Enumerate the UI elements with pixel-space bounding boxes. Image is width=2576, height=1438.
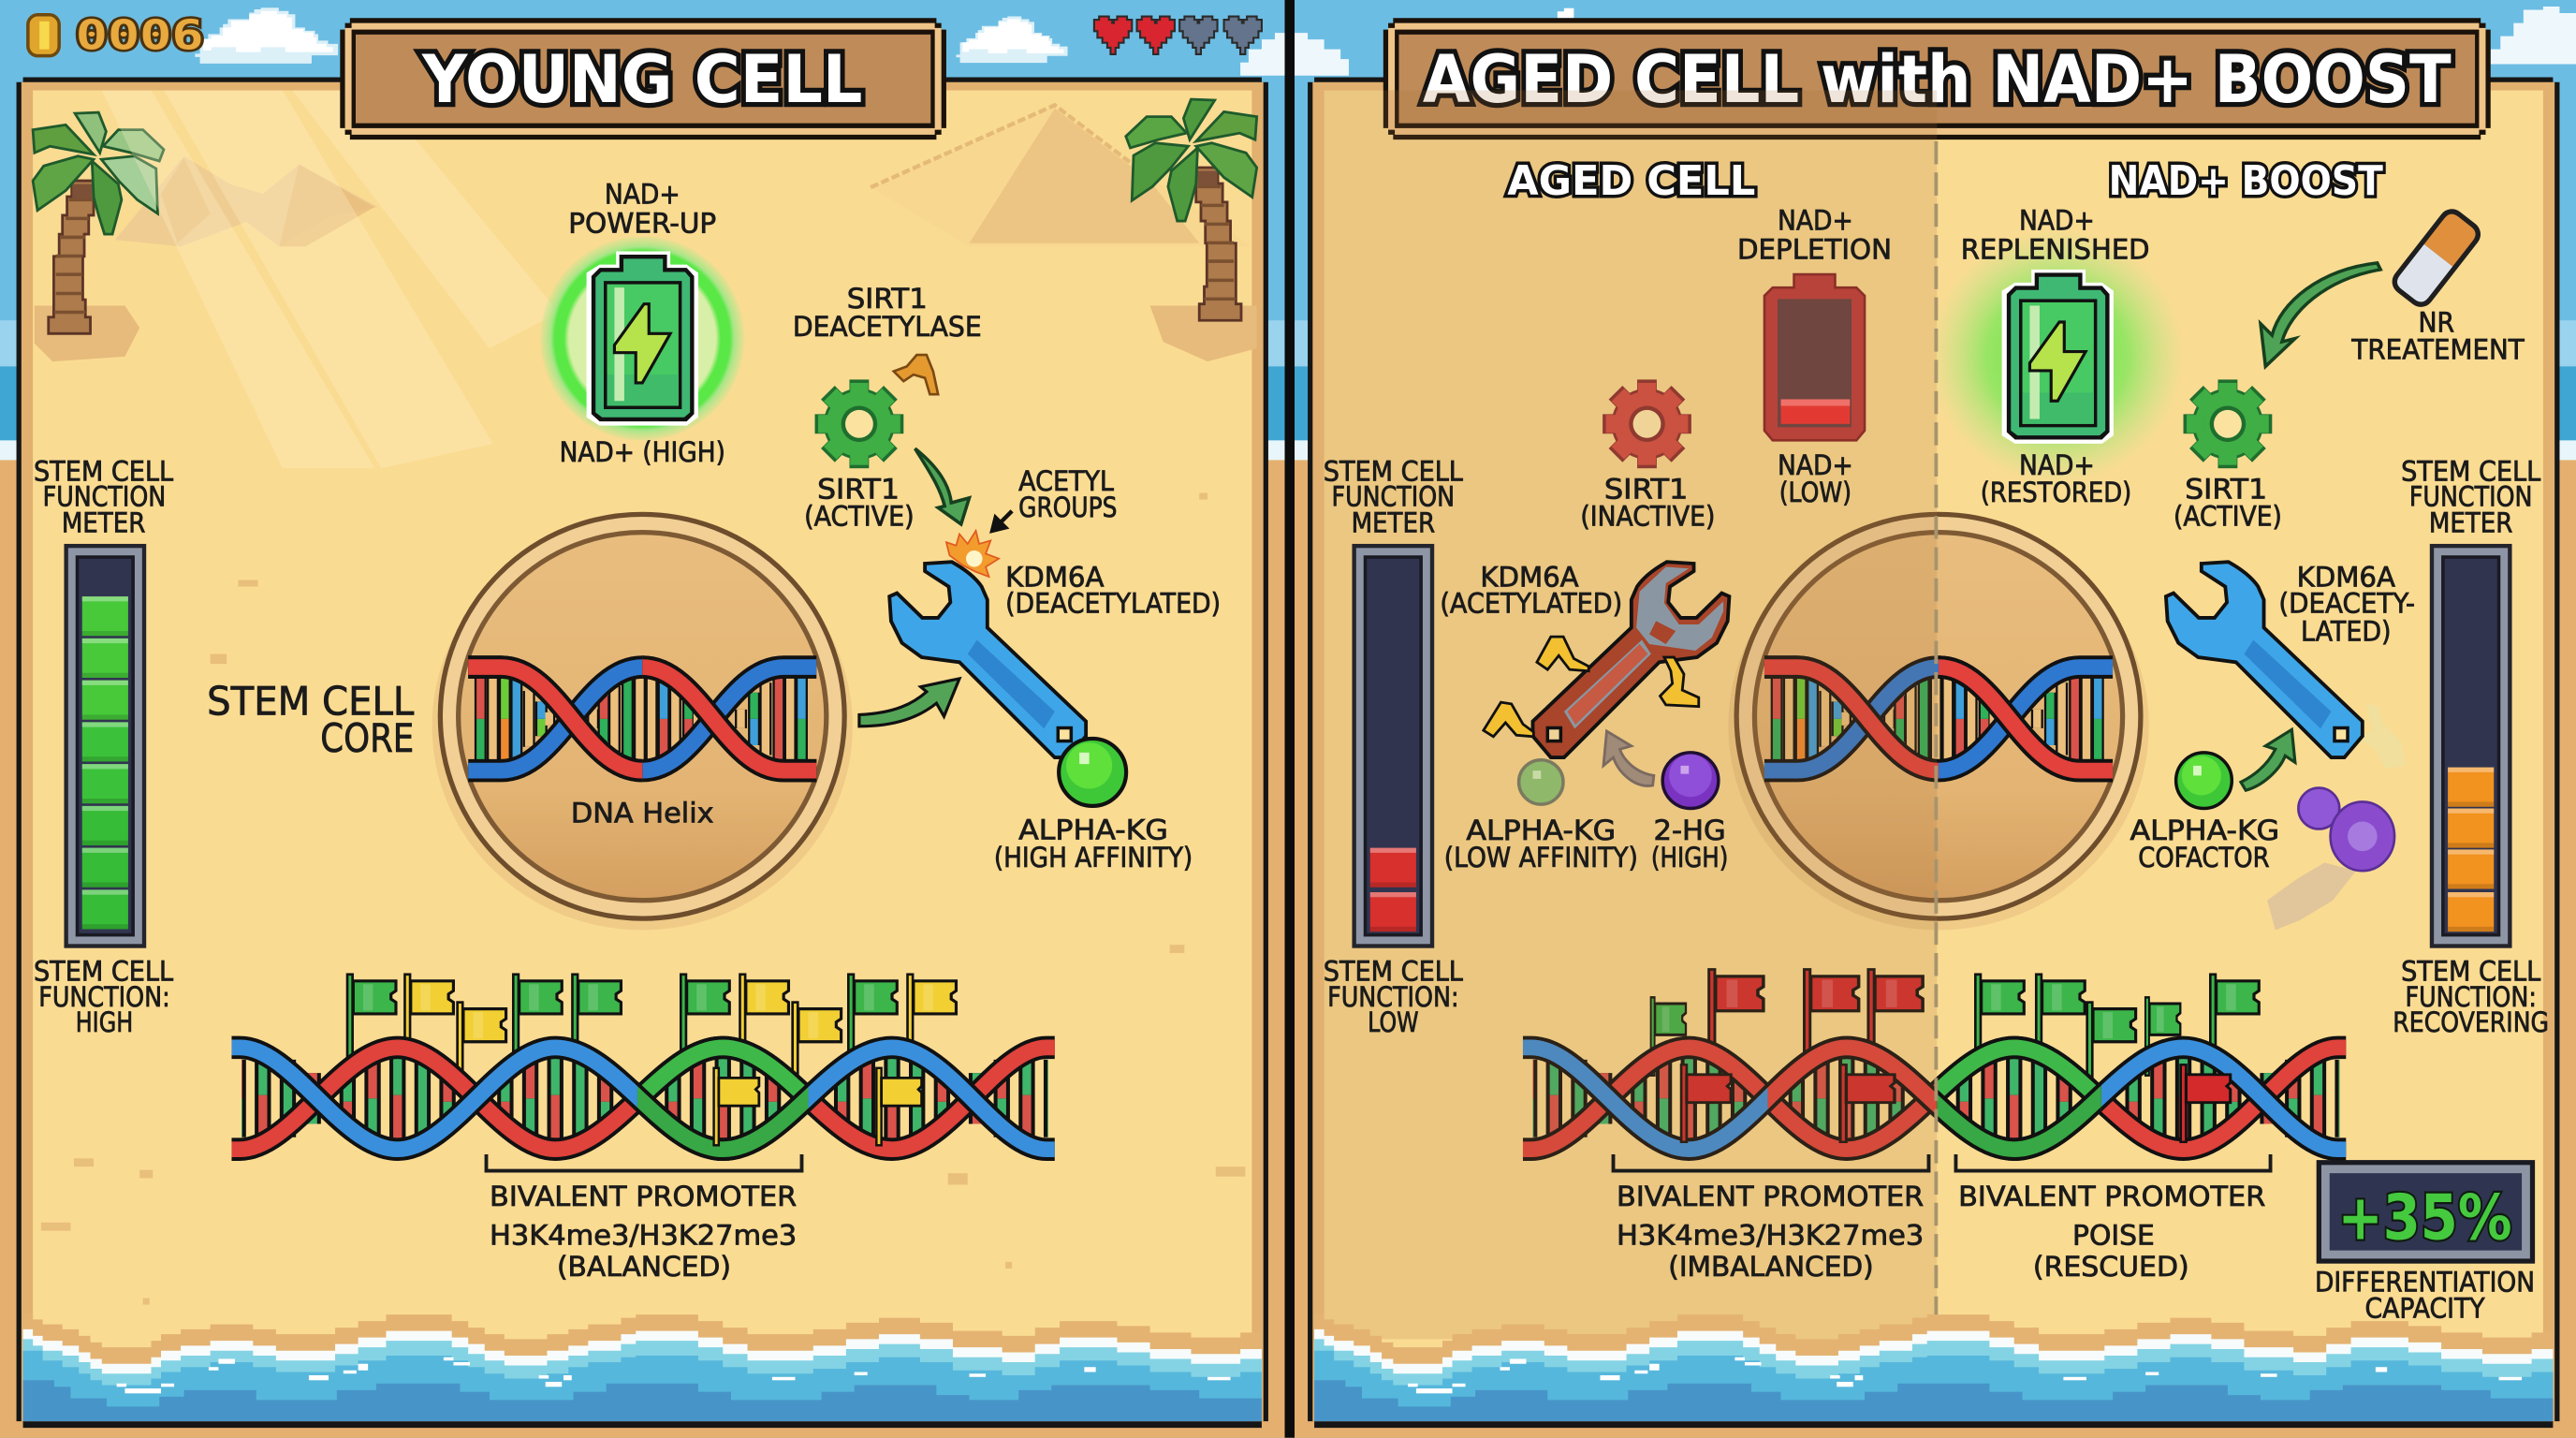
label: alpha-KG high affinity: (HIGH AFFINITY): [994, 842, 1193, 873]
label: NAD+ low: [1778, 449, 1853, 508]
label: SIRT1 inactive: (INACTIVE): [1580, 501, 1715, 533]
icon: green active gear: [2184, 379, 2272, 468]
icon: red inactive gear: [1603, 379, 1691, 468]
icon: alpha-KG ball: [1059, 739, 1126, 806]
aged half dim overlay: [1325, 91, 1937, 1339]
label: acetyl groups: GROUPS: [1018, 492, 1117, 523]
label: SIRT1 active: SIRT1: [817, 474, 900, 506]
meter: boosted stem cell recovering: [2430, 544, 2512, 948]
label: bivalent promoter balanced: BIVALENT PROMOTER: [490, 1181, 797, 1212]
label: KDM6A acetylated: KDM6A: [1480, 562, 1579, 594]
heading: aged cell: AGED CELL: [1507, 157, 1755, 205]
icon: yellow acetyl claws: [1484, 637, 1699, 737]
label: NAD+ power-up: NAD+: [605, 179, 681, 211]
arrow: cofactor to wrench: [2241, 729, 2295, 790]
label: NAD+ restored: (RESTORED): [1981, 477, 2131, 508]
label: stem cell function high: [34, 955, 173, 1038]
label: stem cell core: CORE: [320, 715, 414, 761]
chart: DNA helix core aged: [1764, 668, 2113, 770]
label: KDM6A deacetylated: LATED): [2301, 615, 2392, 647]
label: SIRT1 active: SIRT1: [2185, 474, 2267, 506]
label: NAD+ replenished: NAD+: [2019, 205, 2095, 237]
battery: NAD+ high: [540, 237, 744, 440]
label: NR treatement: NR: [2419, 307, 2454, 339]
label: NAD+ replenished: REPLENISHED: [1961, 233, 2150, 265]
coin score counter: [28, 12, 204, 60]
icon: blue wrench rescued: [2166, 562, 2363, 757]
label: boosted meter title: [2401, 455, 2540, 539]
title plate: young cell: [340, 18, 946, 139]
label: acetyl groups: ACETYL: [1018, 465, 1114, 497]
heading: NAD+ boost: NAD+ BOOST: [2109, 157, 2383, 205]
label: SIRT1 active: [804, 474, 915, 533]
label: bivalent promoter imbalanced: (IMBALANCED): [1668, 1251, 1874, 1283]
chart: bivalent promoter helix with flags young: [194, 975, 1096, 1150]
icon: purple 2-HG dissolving: [2267, 788, 2394, 930]
label: bivalent promoter imbalanced: H3K4me3/H3K27me3: [1617, 1219, 1924, 1251]
label: boosted meter title: METER: [2429, 507, 2512, 539]
meter: aged stem cell low: [1352, 544, 1434, 948]
label: stem cell core: [207, 678, 415, 761]
chart: bivalent promoter helix aged and rescued: [1486, 970, 2387, 1150]
label: stem cell function meter: [34, 455, 173, 539]
clouds: [195, 7, 2576, 76]
label: SIRT1 active: (ACTIVE): [804, 501, 915, 533]
label: bivalent promoter poise rescued: (RESCUED): [2033, 1251, 2189, 1283]
arrow: 2-HG block: [1603, 731, 1654, 785]
label: SIRT1 active: (ACTIVE): [2174, 501, 2282, 533]
icon: 2-HG ball: [1662, 753, 1719, 809]
icon: spark core: [966, 550, 983, 567]
label: NAD+ low: NAD+: [1778, 449, 1853, 481]
label: SIRT1 inactive: [1580, 474, 1715, 533]
icon: NR pill: [2387, 204, 2486, 313]
right scene background: [1288, 0, 2576, 1438]
label: alpha-KG cofactor: COFACTOR: [2138, 842, 2270, 873]
icon: acetyl fragment: [894, 355, 938, 394]
icon: rusty wrench: [1533, 562, 1729, 757]
label: stem cell function recovering: RECOVERING: [2393, 1006, 2549, 1038]
label: SIRT1 active: [2174, 474, 2282, 533]
label: aged meter title: METER: [1352, 507, 1435, 539]
value: +35%: +35%: [2338, 1181, 2512, 1254]
label: NAD+ depletion: DEPLETION: [1737, 233, 1892, 265]
label: KDM6A deacetylated: KDM6A: [2297, 562, 2395, 594]
label: KDM6A deacetylated: [2278, 562, 2415, 647]
label: KDM6A deacetylated: KDM6A: [1005, 562, 1105, 594]
title plate: aged cell: [1383, 18, 2491, 139]
panel: aged cell with NAD+ boost: [1308, 77, 2559, 1428]
palm right: [1126, 99, 1257, 320]
arrow: acetyl pointer: [992, 511, 1012, 531]
label: aged meter title: STEM CELL: [1324, 455, 1463, 487]
label: KDM6A deacetylated: [1005, 562, 1221, 620]
label: 2-HG high: [1651, 814, 1728, 873]
label: KDM6A acetylated: (ACETYLATED): [1440, 588, 1622, 620]
label: stem cell function meter: FUNCTION: [43, 481, 166, 513]
battery: red low: [1764, 274, 1865, 440]
label: aged meter title: [1324, 455, 1463, 539]
chart: DNA helix core young: [468, 668, 816, 770]
shoreline waves: [23, 1313, 1262, 1421]
label: stem cell function high: STEM CELL: [34, 955, 173, 987]
icon: spark: [946, 531, 999, 577]
icon: alpha-KG cofactor ball: [2176, 753, 2232, 809]
bracket: imbalanced: [1614, 1154, 1928, 1171]
label: 2-HG high: 2-HG: [1654, 814, 1726, 846]
sun rays: [102, 91, 559, 468]
icon: low affinity alpha-KG: [1519, 760, 1563, 804]
coin score counter: 0006: [76, 12, 204, 60]
label: differentiation capacity: [2315, 1267, 2535, 1325]
label: differentiation capacity: DIFFERENTIATION: [2315, 1267, 2535, 1299]
label: bivalent promoter imbalanced: [1617, 1181, 1924, 1283]
icon: faded acetyl claw: [2359, 703, 2405, 769]
label: stem cell function recovering: STEM CELL: [2401, 955, 2540, 987]
label: NAD+ high: NAD+ (HIGH): [560, 436, 725, 468]
label: NAD+ low: (LOW): [1779, 477, 1852, 508]
label: NAD+ power-up: [568, 179, 716, 239]
label: NAD+ replenished: [1961, 205, 2150, 265]
label: 2-HG high: (HIGH): [1651, 842, 1728, 873]
label: stem cell function meter: STEM CELL: [34, 455, 173, 487]
label: boosted meter title: FUNCTION: [2409, 481, 2532, 513]
label: NAD+ restored: [1981, 449, 2131, 508]
label: alpha-KG low affinity: [1444, 814, 1638, 873]
shoreline waves right: [1314, 1313, 2553, 1421]
label: KDM6A deacetylated: (DEACETYLATED): [1005, 588, 1221, 620]
arrow: SIRT1 to KDM6A: [915, 448, 970, 524]
title: young cell: YOUNG CELL: [421, 41, 862, 118]
dashed split line: [1935, 141, 1937, 1334]
label: stem cell function recovering: FUNCTION:: [2405, 981, 2537, 1013]
label: alpha-KG cofactor: [2130, 814, 2279, 873]
label: bivalent promoter balanced: H3K4me3/H3K27me3: [490, 1219, 797, 1251]
hearts: [1094, 17, 1262, 54]
label: alpha-KG low affinity: ALPHA-KG: [1466, 814, 1616, 846]
label: aged meter title: FUNCTION: [1332, 481, 1455, 513]
label: bivalent promoter poise rescued: BIVALENT PROMOTER: [1958, 1181, 2265, 1212]
arrow: NR to SIRT1: [2261, 263, 2380, 366]
label: stem cell core: STEM CELL: [207, 678, 415, 724]
label: stem cell function low: FUNCTION:: [1327, 981, 1459, 1013]
icon: green SIRT1 gear: [815, 379, 903, 468]
label: stem cell function meter: METER: [62, 507, 145, 539]
label: stem cell function low: [1324, 955, 1463, 1038]
label: NR treatement: [2350, 307, 2525, 365]
label: alpha-KG high affinity: [994, 814, 1193, 873]
icon: blue wrench KDM6A: [889, 562, 1086, 757]
label: bivalent promoter poise rescued: [1958, 1181, 2265, 1283]
label: boosted meter title: STEM CELL: [2401, 455, 2540, 487]
arrow: core to wrench: [859, 679, 959, 726]
callout: +35%: [2317, 1160, 2535, 1264]
sand dunes: [115, 105, 1251, 246]
label: SIRT1 inactive: SIRT1: [1604, 474, 1688, 506]
label: differentiation capacity: CAPACITY: [2364, 1293, 2485, 1325]
bracket: bivalent promoter young: [487, 1154, 801, 1171]
label: NAD+ depletion: NAD+: [1778, 205, 1853, 237]
label: NR treatement: TREATEMENT: [2350, 333, 2525, 365]
label: SIRT1 deacetylase: [793, 283, 982, 343]
label: bivalent promoter imbalanced: BIVALENT PROMOTER: [1617, 1181, 1924, 1212]
palm shadows: [35, 305, 1257, 361]
label: stem cell function low: LOW: [1368, 1006, 1419, 1038]
meter: stem cell function high: [64, 544, 146, 948]
label: bivalent promoter balanced: [490, 1181, 797, 1283]
label: stem cell function recovering: [2393, 955, 2549, 1038]
label: NAD+ restored: NAD+: [2019, 449, 2095, 481]
NAD+ boost side glow: [1938, 236, 2177, 477]
label: DNA helix: DNA Helix: [571, 797, 714, 829]
label: NAD+ depletion: [1737, 205, 1892, 265]
label: SIRT1 deacetylase: DEACETYLASE: [793, 311, 982, 343]
center divider: [1284, 0, 1295, 1438]
label: KDM6A deacetylated: (DEACETY-: [2278, 588, 2415, 620]
panel: young cell: [17, 77, 1268, 1428]
label: stem cell function high: HIGH: [76, 1006, 133, 1038]
label: NAD+ power-up: POWER-UP: [568, 207, 716, 239]
label: acetyl groups: [1018, 465, 1117, 523]
icon: stem cell core circle: [432, 514, 853, 930]
label: alpha-KG high affinity: ALPHA-KG: [1018, 814, 1168, 845]
palm left: [33, 112, 164, 333]
label: stem cell function high: FUNCTION:: [38, 981, 170, 1013]
bracket: rescued: [1955, 1154, 2271, 1171]
label: bivalent promoter poise rescued: POISE: [2072, 1219, 2155, 1251]
sand specks: [41, 493, 1245, 1305]
label: bivalent promoter balanced: (BALANCED): [557, 1251, 731, 1283]
label: alpha-KG cofactor: ALPHA-KG: [2130, 814, 2279, 846]
label: stem cell function low: STEM CELL: [1324, 955, 1463, 987]
battery: green restored: [2002, 270, 2114, 444]
core circle aged cell: [1728, 514, 2149, 930]
label: alpha-KG low affinity: (LOW AFFINITY): [1444, 842, 1638, 873]
label: KDM6A acetylated: [1440, 562, 1622, 620]
left scene background: [0, 0, 1288, 1438]
label: SIRT1 deacetylase: SIRT1: [847, 283, 928, 315]
title: aged cell with NAD+ boost: AGED CELL with NAD+ BOOST: [1423, 41, 2452, 118]
